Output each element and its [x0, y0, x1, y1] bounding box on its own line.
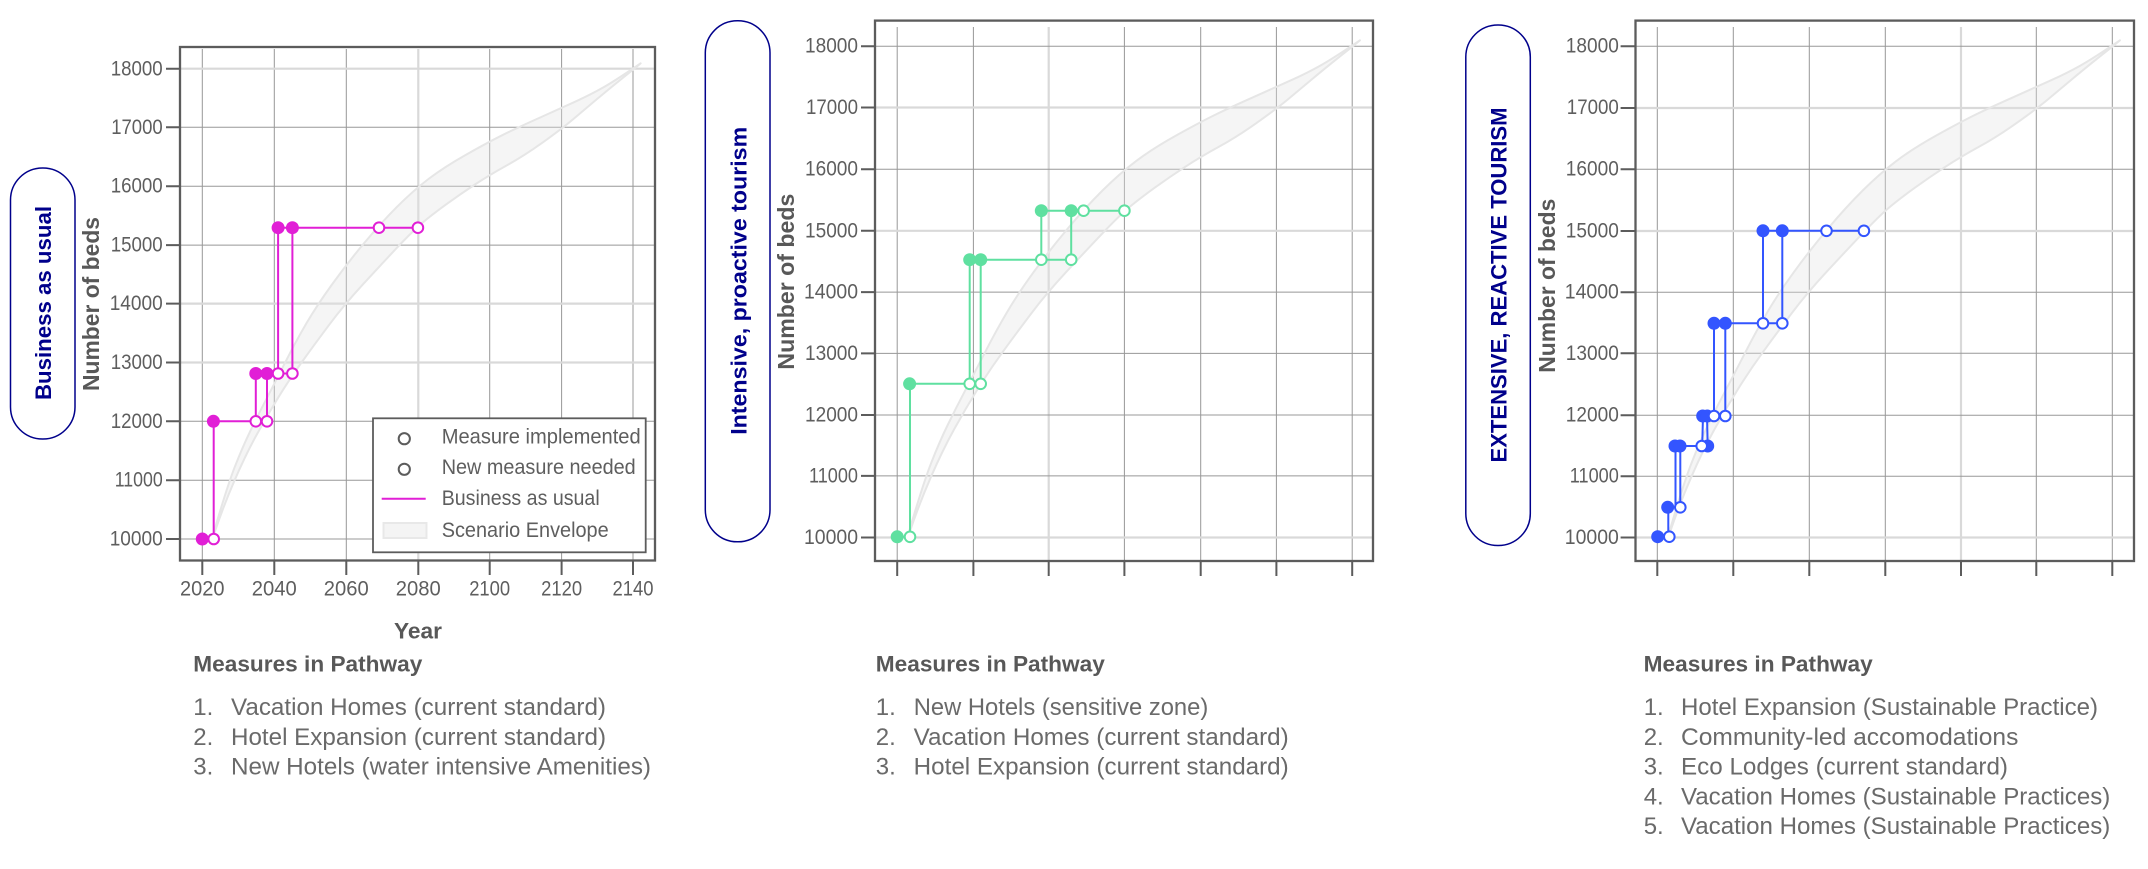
measures list: intensive: 2.: [876, 724, 896, 751]
measures list: intensive: [876, 651, 1289, 780]
measures list: extensive: Vacation Homes (Sustainable Practices): [1681, 813, 2110, 840]
y axis labels: 12000: [805, 402, 858, 426]
y axis labels: 17000: [1567, 95, 1619, 119]
markers: measure implemented: [891, 204, 1078, 543]
y axis labels: [110, 56, 163, 551]
x axis labels: 2080: [396, 576, 441, 600]
y axis labels: 18000: [111, 56, 163, 80]
y axis labels: 11000: [115, 468, 163, 492]
measures list: extensive: 1.: [1644, 694, 1664, 721]
legend: New measure needed: [442, 455, 636, 479]
y axis labels: 13000: [111, 350, 163, 374]
measures list: intensive: New Hotels (sensitive zone): [914, 694, 1208, 721]
markers: new measure needed: [905, 205, 1130, 542]
y axis labels: 13000: [805, 341, 858, 365]
y axis labels: 16000: [805, 157, 858, 181]
scenario pill: extensive, reactive tourism: EXTENSIVE, REACTIVE TOURISM: [1486, 108, 1511, 462]
y axis labels: 10000: [110, 526, 163, 550]
measures list: business as usual: 1.: [193, 694, 213, 721]
measures list: extensive: Community-led accomodations: [1681, 724, 2018, 751]
pathway line: extensive: [1658, 231, 1864, 537]
chart: intensive pathway: [804, 21, 1373, 576]
y axis labels: 15000: [1566, 218, 1619, 242]
y axis labels: 14000: [804, 280, 858, 304]
panel: extensive, reactive tourism: [1466, 21, 2134, 840]
measures list: business as usual: [193, 651, 651, 780]
x axis labels: 2140: [612, 576, 654, 600]
scenario pill: intensive, proactive tourism: [705, 21, 770, 542]
x axis title: Year: [394, 618, 442, 643]
y axis labels: 17000: [111, 115, 163, 139]
y axis labels: 13000: [1566, 341, 1619, 365]
scenario pill: business as usual: Business as usual: [31, 206, 56, 400]
legend: Business as usual: [442, 486, 600, 510]
markers: new measure needed: [208, 222, 423, 544]
y axis title: Number of beds: [773, 194, 799, 370]
y axis labels: [1565, 34, 1619, 549]
y axis labels: 10000: [1565, 525, 1619, 549]
markers: new measure needed: [1664, 226, 1869, 542]
x axis labels: 2040: [252, 576, 297, 600]
panel: business as usual: [10, 47, 655, 780]
scenario pill: business as usual: [10, 168, 75, 439]
measures list: intensive: 3.: [876, 754, 896, 780]
x axis labels: 2020: [180, 576, 225, 600]
measures list: business as usual: Measures in Pathway: [193, 651, 423, 676]
legend: [373, 418, 646, 552]
measures list: intensive: Measures in Pathway: [876, 651, 1105, 676]
measures list: extensive: 3.: [1644, 754, 1664, 780]
pathway line: intensive: [897, 211, 1124, 537]
y axis labels: 12000: [1566, 402, 1619, 426]
y axis labels: 16000: [111, 174, 163, 198]
x axis labels: 2100: [469, 576, 510, 600]
measures list: business as usual: 2.: [193, 724, 213, 751]
legend: Measure implemented: [442, 424, 641, 448]
measures list: business as usual: Vacation Homes (current standard): [231, 694, 606, 721]
y axis labels: 18000: [805, 34, 858, 58]
measures list: business as usual: Hotel Expansion (current standard): [231, 724, 606, 751]
measures list: extensive: Eco Lodges (current standard): [1681, 754, 2008, 780]
markers: measure implemented: [1651, 224, 1789, 543]
x axis labels: 2120: [541, 576, 582, 600]
y axis title: Number of beds: [1534, 199, 1560, 373]
y axis labels: 14000: [1565, 280, 1619, 304]
measures list: extensive: Vacation Homes (Sustainable Practices): [1681, 784, 2110, 810]
y axis labels: 11000: [1570, 463, 1619, 487]
pathway line: business as usual: [202, 228, 418, 539]
measures list: business as usual: New Hotels (water intensive Amenities): [231, 754, 651, 780]
y axis labels: 10000: [804, 525, 858, 549]
y axis labels: 12000: [111, 409, 163, 433]
x axis labels: 2060: [324, 576, 369, 600]
measures list: business as usual: 3.: [193, 754, 213, 780]
y axis labels: 18000: [1566, 34, 1619, 58]
measures list: intensive: 1.: [876, 694, 896, 721]
panel: intensive, proactive tourism: [705, 21, 1373, 781]
scenario pill: extensive, reactive tourism: [1466, 25, 1530, 546]
measures list: extensive: Measures in Pathway: [1644, 651, 1873, 676]
chart: extensive pathway: [1565, 21, 2134, 576]
chart: business as usual pathway: [110, 47, 655, 600]
measures list: extensive: 5.: [1644, 813, 1664, 840]
markers: measure implemented: [196, 221, 299, 545]
y axis labels: 15000: [111, 233, 163, 257]
measures list: extensive: 4.: [1644, 784, 1664, 810]
measures list: extensive: 2.: [1644, 724, 1664, 751]
x axis labels: [180, 576, 654, 600]
measures list: intensive: Hotel Expansion (current standard): [914, 754, 1289, 780]
y axis labels: 15000: [805, 218, 858, 242]
measures list: extensive: [1644, 651, 2110, 840]
measures list: intensive: Vacation Homes (current standard): [914, 724, 1289, 751]
y axis labels: 17000: [806, 95, 858, 119]
y axis labels: 11000: [809, 463, 858, 487]
y axis labels: 14000: [110, 291, 163, 315]
legend: Scenario Envelope: [442, 518, 609, 542]
y axis labels: 16000: [1566, 157, 1619, 181]
y axis labels: [804, 34, 858, 549]
y axis title: Number of beds: [78, 217, 104, 391]
scenario pill: intensive, proactive tourism: Intensive, proactive tourism: [727, 127, 752, 435]
measures list: extensive: Hotel Expansion (Sustainable Practice): [1681, 694, 2098, 721]
